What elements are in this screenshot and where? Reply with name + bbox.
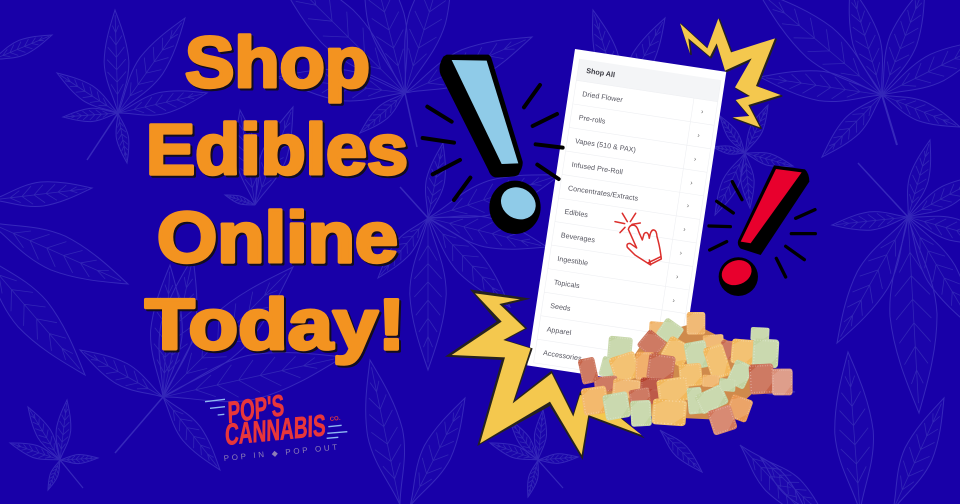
icon: blue exclamation mark bbox=[423, 55, 563, 234]
leaf: bottom left bbox=[8, 399, 98, 491]
leaf: behind red exclamation bbox=[708, 102, 795, 219]
menu rows: › bbox=[690, 180, 694, 187]
phone menu panel bbox=[527, 49, 726, 388]
menu rows: › bbox=[668, 321, 672, 329]
title bbox=[145, 24, 408, 365]
menu rows: Concentrates/Extracts bbox=[568, 184, 639, 203]
menu rows: Pre-rolls bbox=[578, 114, 606, 126]
menu rows: Seeds bbox=[550, 302, 571, 313]
menu rows: Dried Flower bbox=[582, 90, 624, 104]
menu rows bbox=[534, 59, 721, 384]
burst rays bbox=[423, 85, 563, 200]
leaf: lower centre left bbox=[74, 251, 348, 477]
menu rows: › bbox=[683, 226, 687, 234]
yellow burst: bottom left bbox=[445, 289, 645, 460]
title: Today! bbox=[145, 286, 405, 365]
leaf: behind menu top bbox=[582, 7, 675, 105]
menu rows: Beverages bbox=[560, 231, 596, 244]
menu rows: Infused Pre-Roll bbox=[571, 161, 624, 176]
leaf: upper left bbox=[52, 10, 209, 164]
menu rows: › bbox=[697, 132, 701, 140]
menu rows: › bbox=[700, 109, 704, 116]
menu rows: › bbox=[686, 203, 690, 210]
icon: pointing hand cursor bbox=[615, 213, 661, 265]
leaf: bottom centre bbox=[488, 409, 578, 498]
menu header: Shop All: Shop All bbox=[586, 66, 616, 79]
candy pile bbox=[578, 312, 793, 436]
logo: Pop's Cannabis Co.: POP IN ◆ POP OUT bbox=[223, 443, 338, 463]
leaf: right middle bbox=[822, 137, 960, 414]
burst rays bbox=[709, 182, 815, 277]
logo: Pop's Cannabis Co.: CO. bbox=[330, 416, 341, 423]
menu rows: › bbox=[679, 250, 683, 257]
menu rows: › bbox=[672, 297, 676, 305]
leaf: centre behind exclamation bbox=[371, 141, 565, 370]
menu rows: Apparel bbox=[546, 325, 572, 337]
menu rows: › bbox=[665, 344, 669, 351]
menu rows: › bbox=[693, 156, 697, 163]
menu rows: › bbox=[675, 274, 680, 281]
menu rows: Edibles bbox=[564, 208, 589, 219]
title: Shop bbox=[185, 24, 370, 103]
menu rows: Ingestible bbox=[557, 255, 589, 267]
menu header: Shop All bbox=[576, 59, 721, 102]
leaf: top right bbox=[744, 0, 960, 164]
menu rows: Vapes (510 & PAX) bbox=[575, 137, 636, 154]
dot bbox=[489, 181, 542, 234]
leaf: behind Shop bbox=[254, 0, 539, 147]
yellow burst: top right bbox=[680, 18, 782, 128]
icon: red exclamation mark bbox=[709, 165, 815, 296]
logo: Pop's Cannabis Co.: CANNABIS bbox=[225, 409, 326, 452]
menu rows: Topicals bbox=[553, 278, 581, 290]
leaf: behind Edibles bbox=[224, 102, 305, 210]
title: Edibles bbox=[146, 111, 408, 190]
logo: Pop's Cannabis Co. bbox=[205, 389, 347, 463]
title: Online bbox=[157, 199, 398, 278]
dot bbox=[718, 256, 758, 296]
menu rows: Accessories bbox=[543, 349, 583, 363]
logo: Pop's Cannabis Co.: POP'S bbox=[227, 389, 285, 430]
